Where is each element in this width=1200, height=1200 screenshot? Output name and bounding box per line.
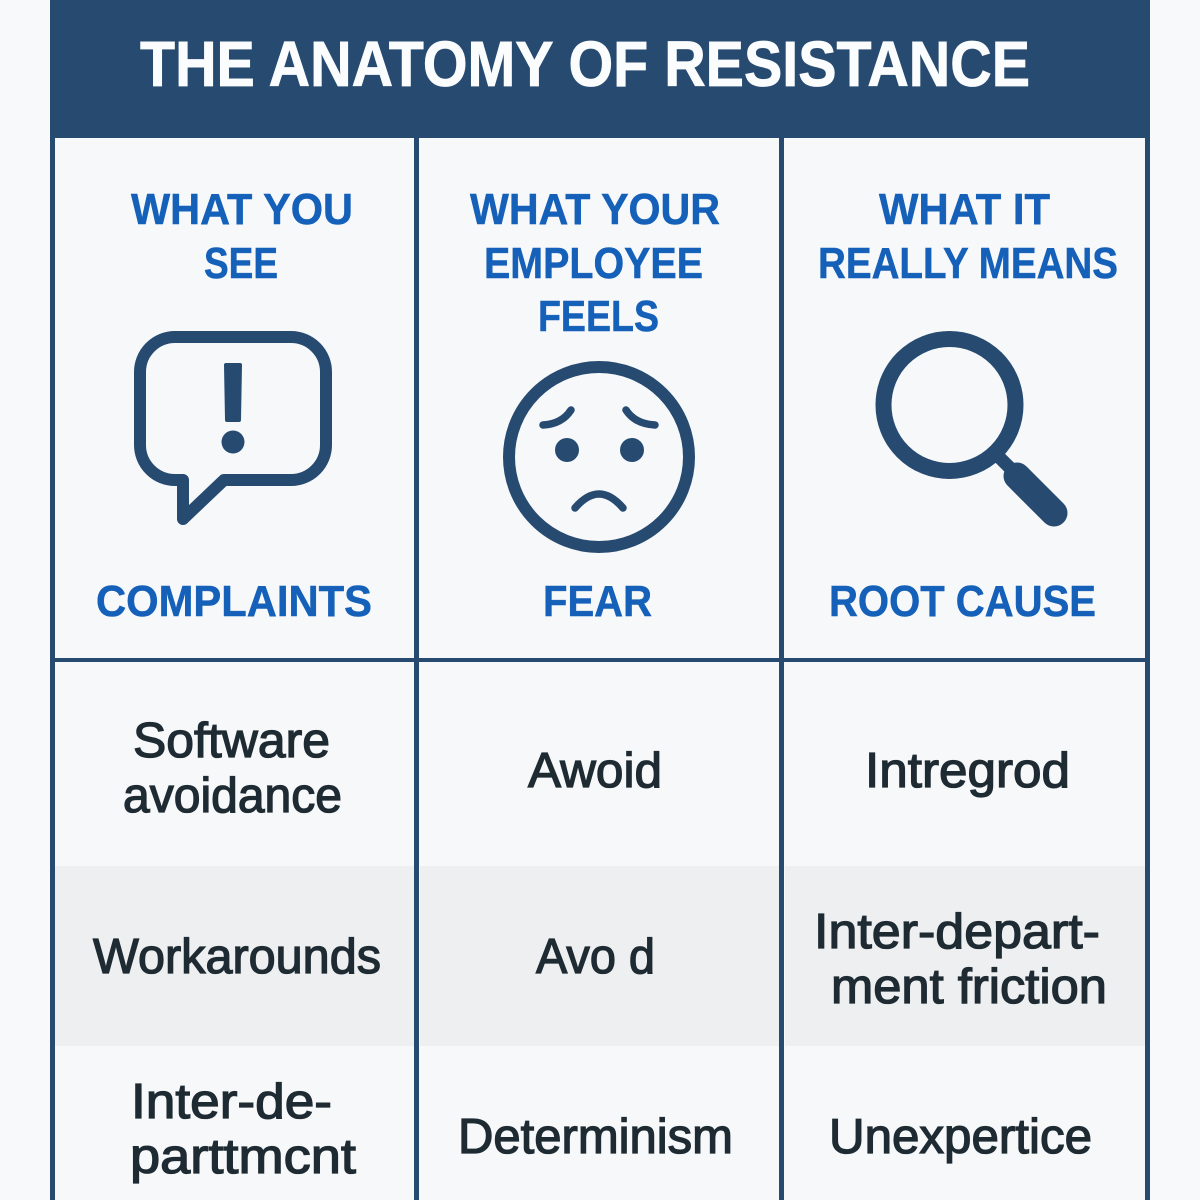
cell: awoid: Awoid xyxy=(528,744,662,798)
icon: magnifying glass xyxy=(884,339,1054,513)
icon: worried face xyxy=(509,367,689,547)
cell: inter-department xyxy=(130,1075,356,1184)
heading: what your employee feels xyxy=(470,185,720,341)
cell: avo d: Avo d xyxy=(536,930,655,984)
title banner: THE ANATOMY OF RESISTANCE xyxy=(140,28,1030,100)
label: root cause: ROOT CAUSE xyxy=(829,577,1096,626)
heading: what your employee feels: EMPLOYEE xyxy=(484,239,703,288)
cell: determinism: Determinism xyxy=(458,1110,733,1164)
cell: workarounds: Workarounds xyxy=(93,930,381,984)
cell: software avoidance: avoidance xyxy=(123,769,342,823)
heading: what you see: SEE xyxy=(204,239,278,288)
heading: what your employee feels: FEELS xyxy=(538,292,659,341)
label: complaints: COMPLAINTS xyxy=(96,577,372,626)
cell: inter-department: Inter-de- xyxy=(131,1075,332,1129)
title banner xyxy=(50,0,1150,138)
heading: what it really means xyxy=(818,185,1118,288)
heading: what it really means: REALLY MEANS xyxy=(818,239,1118,288)
cell: software avoidance xyxy=(123,714,342,823)
heading: what it really means: WHAT IT xyxy=(879,185,1050,234)
icon: speech bubble with exclamation mark xyxy=(140,337,326,519)
label: fear: FEAR xyxy=(543,577,652,626)
heading: what you see: WHAT YOU xyxy=(131,185,353,234)
cell: software avoidance: Software xyxy=(133,714,330,768)
cell: inter-department friction xyxy=(814,905,1107,1014)
heading: what you see xyxy=(131,185,353,288)
cell: intregrod: Intregrod xyxy=(865,744,1070,798)
cell: inter-department: parttmcnt xyxy=(130,1130,356,1184)
heading: what your employee feels: WHAT YOUR xyxy=(470,185,720,234)
cell: inter-department friction: Inter-depart- xyxy=(814,905,1100,959)
cell: unexpertice: Unexpertice xyxy=(829,1110,1092,1164)
cell: inter-department friction: ment friction xyxy=(831,960,1107,1014)
